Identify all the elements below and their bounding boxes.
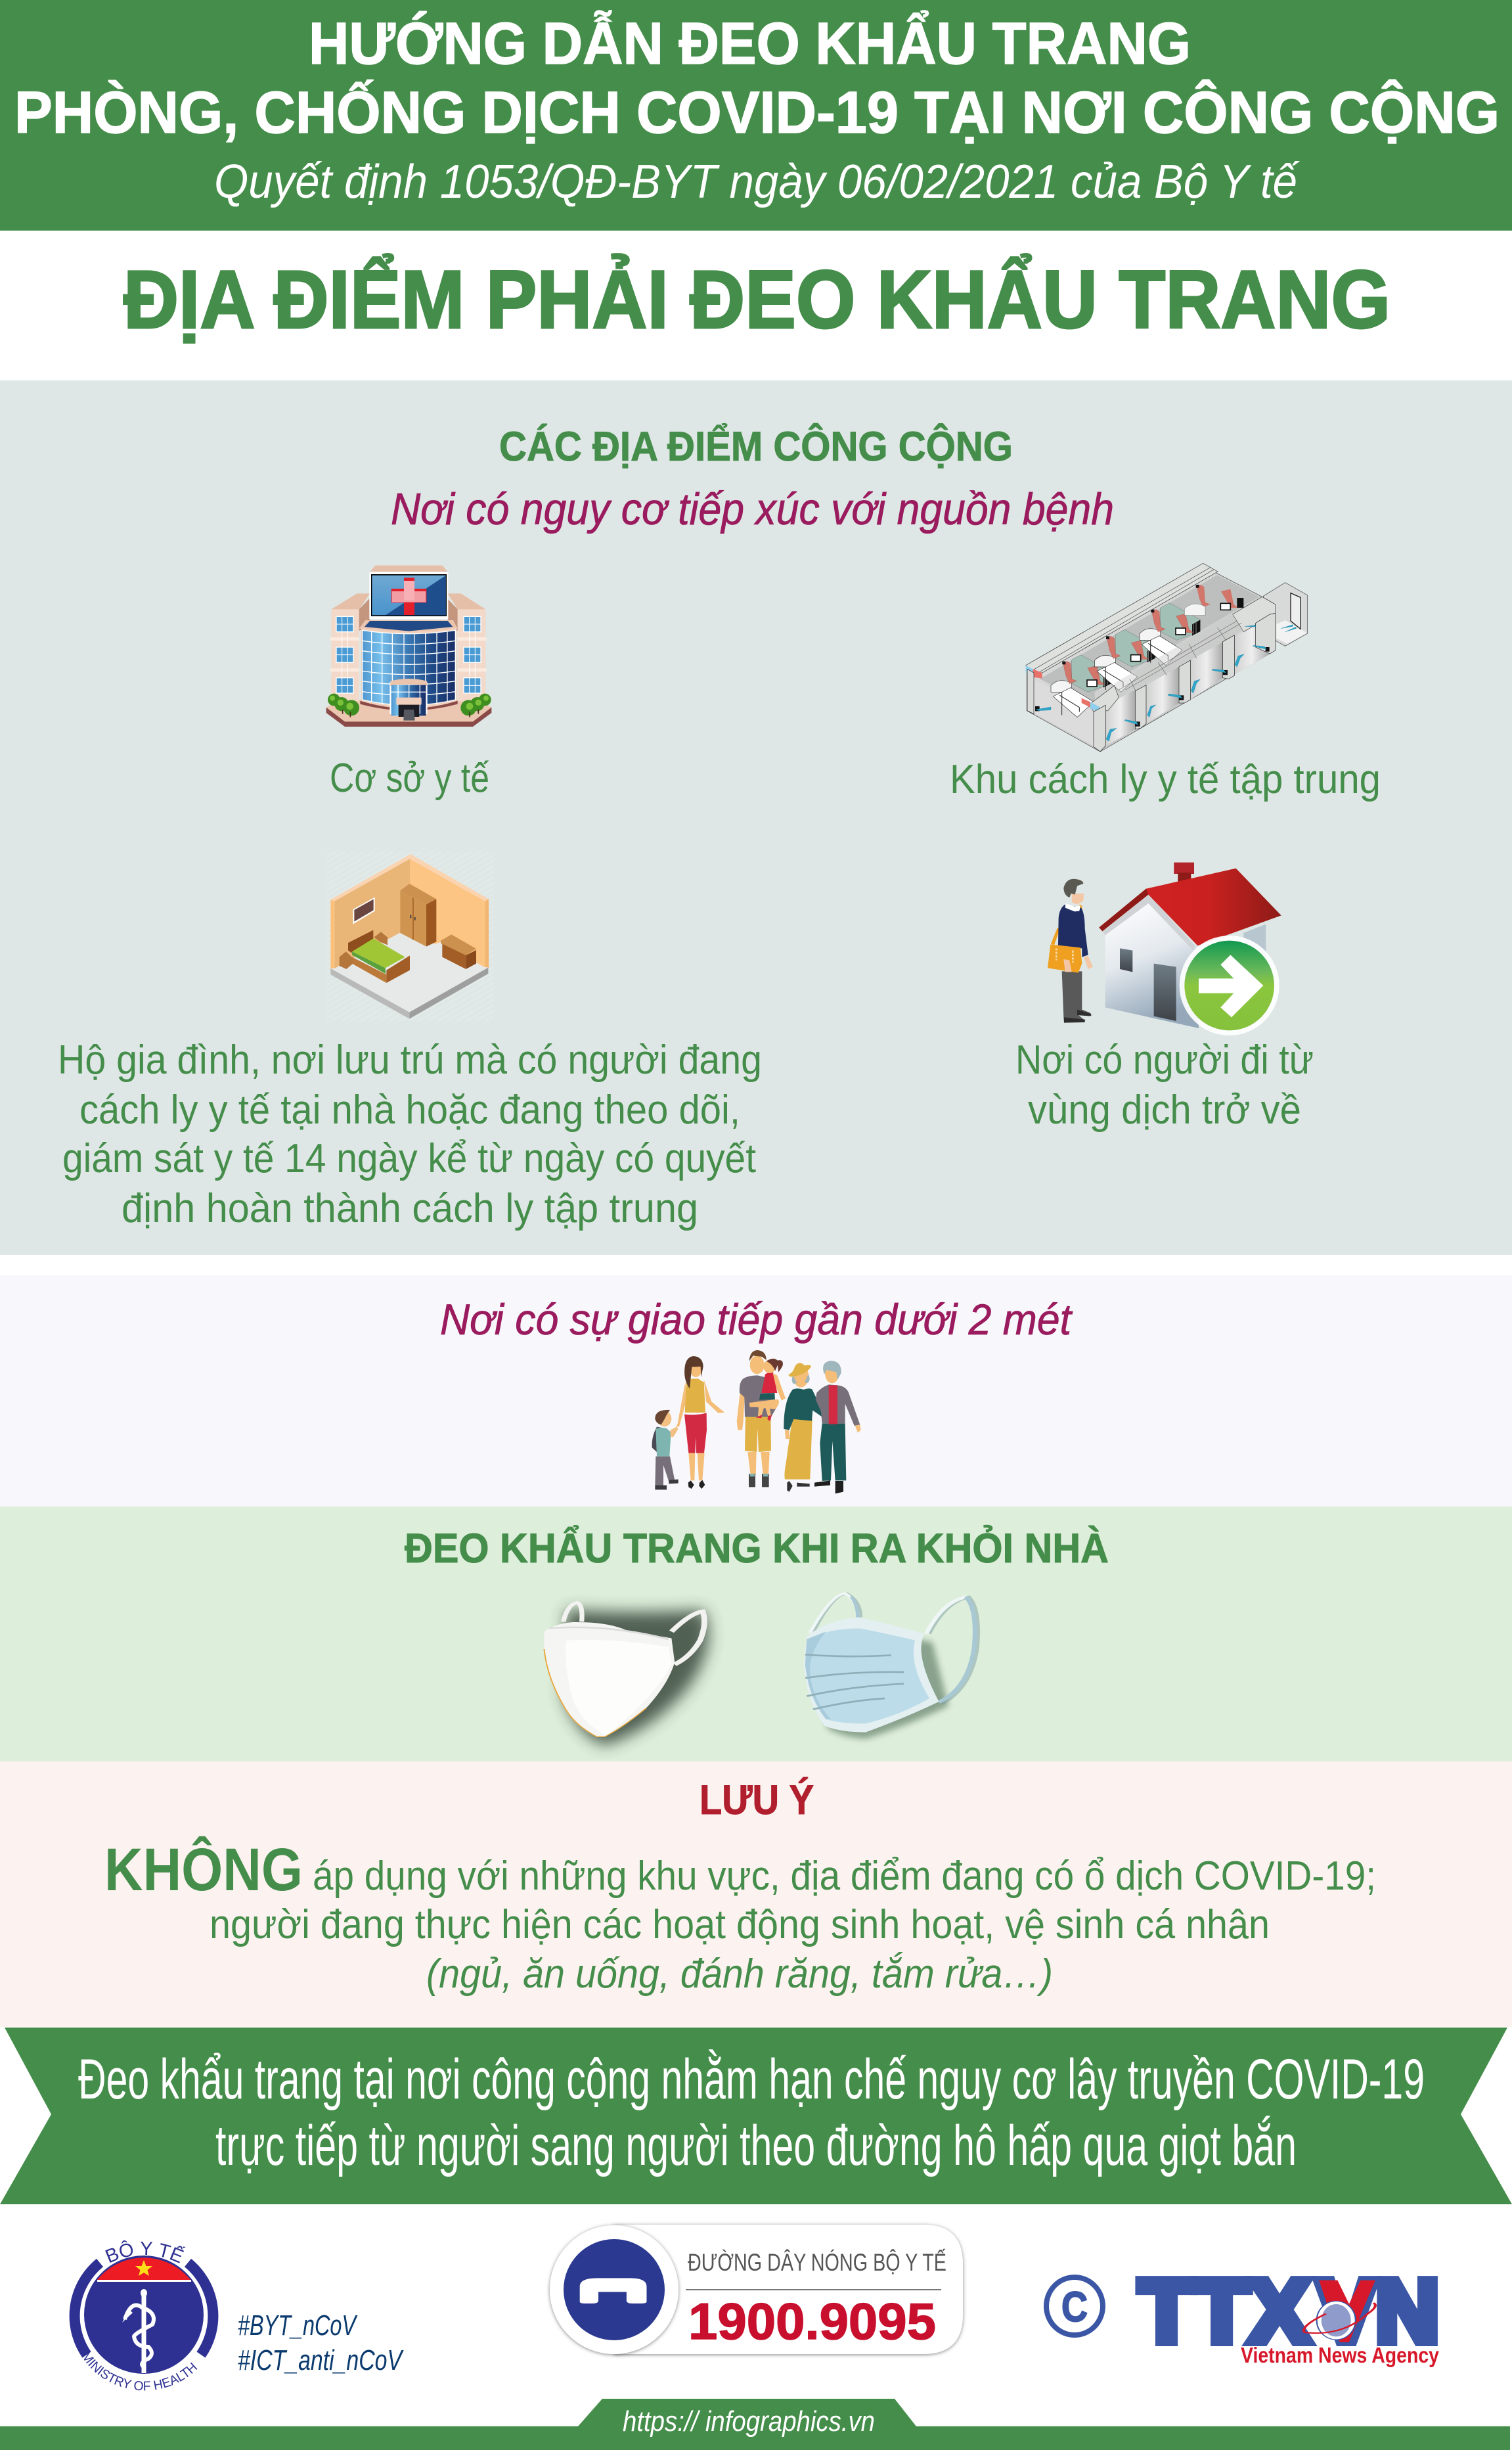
icon: family group <box>652 1350 861 1493</box>
logo: Ministry of Health: BỘ Y TẾ <box>105 2240 186 2263</box>
hashtags: #ICT_anti_nCoV <box>238 2344 404 2376</box>
banner ribbon <box>0 2028 1512 2204</box>
hashtags: #BYT_nCoV <box>238 2309 358 2342</box>
label: household quarantine: định hoàn thành cách ly tập trung <box>122 1186 698 1231</box>
house <box>1174 863 1194 874</box>
label: household quarantine: Hộ gia đình, nơi lưu trú mà có người đang <box>58 1037 762 1083</box>
grandfather <box>814 1361 861 1493</box>
logo: TTXVN: TTX <box>1139 2261 1310 2361</box>
label: returning from outbreak area <box>1015 1037 1314 1133</box>
copyright symbol: C <box>1061 2283 1088 2330</box>
note text: áp dụng với những khu vực, địa điểm đang có ổ dịch COVID-19; <box>313 1853 1376 1899</box>
label: quarantine area: Khu cách ly y tế tập trung <box>950 757 1381 802</box>
note text <box>104 1836 1376 1997</box>
note text: (ngủ, ăn uống, đánh răng, tắm rửa…) <box>426 1951 1053 1997</box>
header band <box>0 0 1512 231</box>
panel: note <box>0 1761 1512 2027</box>
note heading: LƯU Ý <box>700 1777 814 1823</box>
close contact heading: Nơi có sự giao tiếp gần dưới 2 mét <box>440 1295 1073 1344</box>
subtitle: Quyết định 1053/QĐ-BYT ngày 06/02/2021 của Bộ Y tế <box>214 156 1301 208</box>
icon: bedroom <box>326 852 494 1020</box>
copyright symbol <box>1046 2277 1103 2335</box>
logo: Ministry of Health <box>70 2240 218 2390</box>
icon: hospital <box>326 566 491 727</box>
icon: white cloth mask <box>544 1602 709 1746</box>
label: returning from outbreak area: vùng dịch trở về <box>1028 1087 1301 1133</box>
panel: public places <box>0 380 1512 1255</box>
website url: https:// infographics.vn <box>623 2405 875 2438</box>
icon: quarantine ward <box>1026 563 1308 752</box>
title <box>14 10 1500 146</box>
panel: wear a mask <box>0 1507 1512 1761</box>
panel subheading: Nơi có nguy cơ tiếp xúc với nguồn bệnh <box>391 484 1114 534</box>
man with child <box>737 1350 786 1487</box>
man <box>1048 879 1093 1023</box>
title: HƯỚNG DẪN ĐEO KHẨU TRANG <box>309 10 1191 77</box>
woman <box>676 1356 724 1489</box>
hotline label: ĐƯỜNG DÂY NÓNG BỘ Y TẾ <box>688 2249 946 2276</box>
hotline pill <box>550 2225 963 2354</box>
icon: person returning home <box>1048 863 1281 1035</box>
note text: người đang thực hiện các hoạt động sinh hoạt, vệ sinh cá nhân <box>210 1902 1270 1947</box>
label: household quarantine: cách ly y tế tại nhà hoặc đang theo dõi, <box>79 1087 740 1133</box>
footer bar <box>0 2399 1510 2450</box>
hotline number: 1900.9095 <box>688 2292 936 2350</box>
logo: Ministry of Health: MINISTRY OF HEALTH <box>81 2352 197 2390</box>
icon: phone handset <box>580 2278 646 2303</box>
icon: blue medical mask <box>804 1593 978 1739</box>
label: returning from outbreak area: Nơi có người đi từ <box>1015 1037 1314 1083</box>
grandmother <box>784 1363 822 1492</box>
agency name: Vietnam News Agency <box>1241 2343 1440 2367</box>
mask heading: ĐEO KHẨU TRANG KHI RA KHỎI NHÀ <box>405 1525 1109 1572</box>
banner text <box>78 2048 1425 2177</box>
logo: TTXVN <box>1139 2261 1440 2367</box>
section heading: ĐỊA ĐIỂM PHẢI ĐEO KHẨU TRANG <box>123 254 1390 346</box>
hashtags <box>238 2309 404 2376</box>
panel heading: CÁC ĐỊA ĐIỂM CÔNG CỘNG <box>499 423 1013 470</box>
boy <box>652 1410 678 1489</box>
logo: TTXVN: VN <box>1317 2261 1439 2361</box>
label: household quarantine: giám sát y tế 14 ngày kể từ ngày có quyết <box>62 1136 756 1181</box>
label: household quarantine <box>58 1037 762 1231</box>
note text: KHÔNG <box>104 1836 303 1903</box>
panel: close contact <box>0 1275 1512 1507</box>
label: medical facility: Cơ sở y tế <box>330 756 489 801</box>
